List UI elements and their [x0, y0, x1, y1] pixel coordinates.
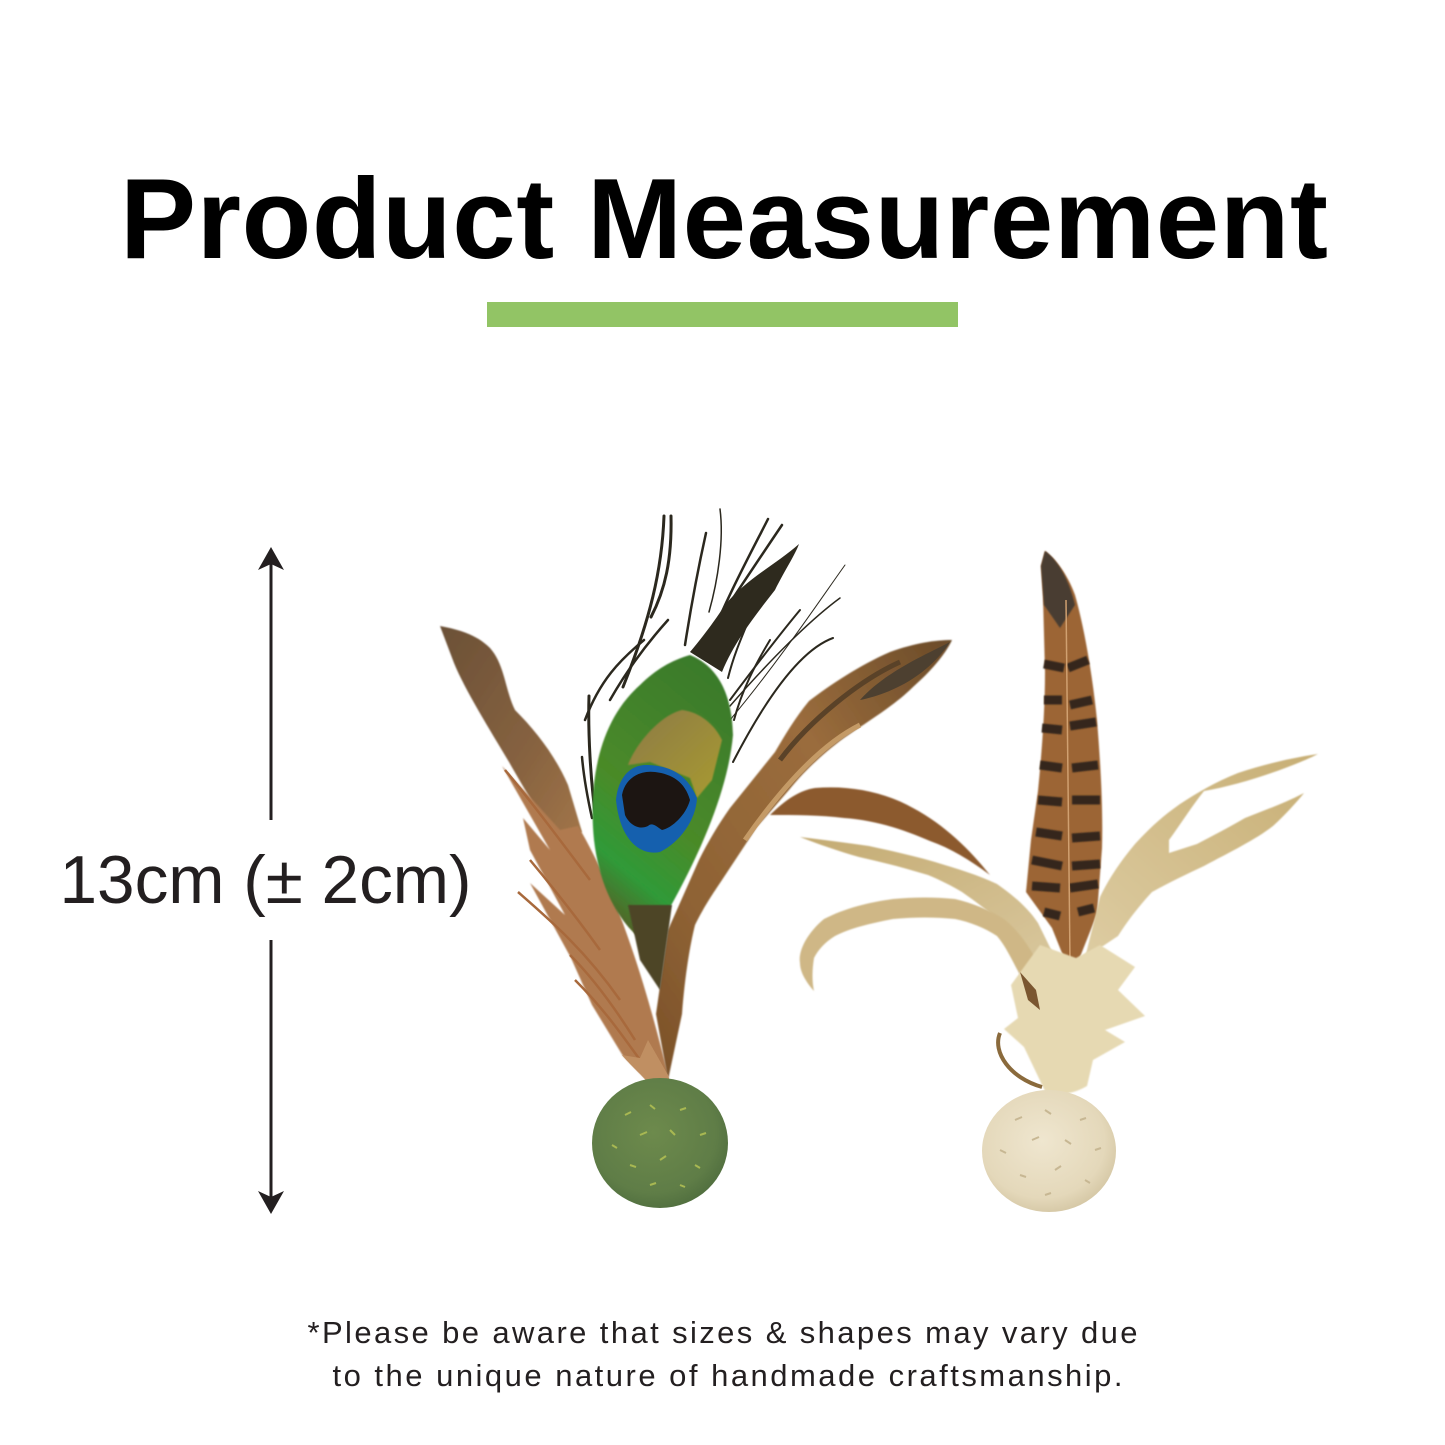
- green underline bar: [487, 302, 958, 327]
- product: peacock feather toy with green ball: [440, 509, 990, 1208]
- footnote: [308, 1315, 1138, 1393]
- fluffy feather base: [1004, 945, 1145, 1094]
- feather base: [622, 1040, 672, 1090]
- dark patch in fluff: [1020, 972, 1040, 1010]
- small curled feather: [998, 1033, 1042, 1087]
- peacock fronds: [582, 509, 845, 827]
- footnote: to the unique nature of handmade craftsmanship.: [332, 1358, 1122, 1393]
- measurement label: 13cm (± 2cm): [60, 842, 472, 918]
- right brown feather: [656, 640, 990, 1080]
- pheasant tail feather: [1026, 551, 1102, 967]
- arrow: height dimension: [258, 547, 284, 1214]
- product: pheasant feather toy with cream ball: [800, 551, 1318, 1212]
- right tan feathers: [1085, 754, 1318, 958]
- title: Product Measurement: [120, 156, 1328, 283]
- footnote: *Please be aware that sizes & shapes may vary due: [308, 1315, 1138, 1350]
- left brown feather: [440, 626, 668, 1090]
- dark frond mass: [690, 544, 799, 672]
- peacock eye: [593, 655, 733, 990]
- cream catnip ball: [982, 1090, 1116, 1212]
- left tan feathers: [800, 837, 1066, 980]
- curled tan feather: [800, 898, 1048, 1010]
- green catnip ball: [592, 1078, 728, 1208]
